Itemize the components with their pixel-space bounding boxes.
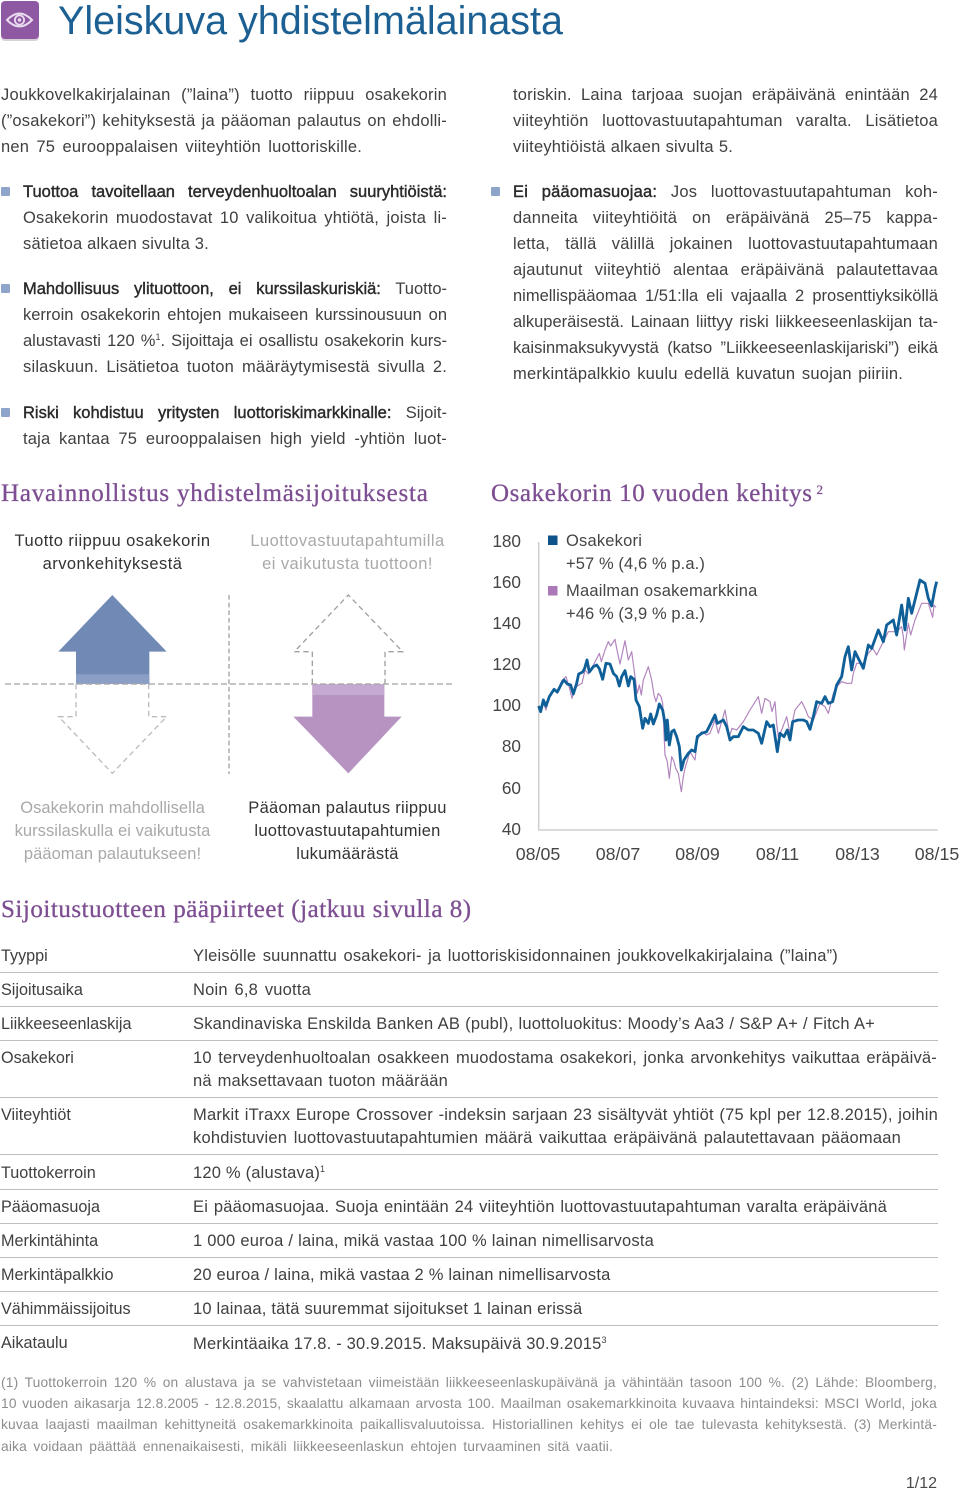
bullet: ylituotto: kerroin osakekorin ehtojen mukaiseen kurssinousuun on bbox=[23, 306, 447, 324]
legend: osakekori: +57 % (4,6 % p.a.) bbox=[566, 555, 705, 573]
table: pääpiirteet: 10 terveydenhuoltoalan osakkeen muodostama osakekori, jonka arvonkehitys vaikuttaa eräpäivä- bbox=[193, 1049, 937, 1067]
table: pääpiirteet: Viiteyhtiöt bbox=[1, 1106, 71, 1124]
footnotes bbox=[1, 1375, 937, 1454]
caption: pääoman palautus: Pääoman palautus riippuu bbox=[248, 799, 447, 817]
bullet: ylituotto bbox=[1, 280, 447, 376]
heading: kehitys: Osakekorin 10 vuoden kehitys 2 bbox=[491, 480, 824, 507]
legend: osakekori: Osakekori bbox=[566, 532, 642, 550]
table: pääpiirteet bbox=[0, 947, 938, 1353]
table: pääpiirteet: Skandinaviska Enskilda Banken AB (publ), luottoluokitus: Moody’s Aa3 / S&P A+ / Fitch A+ bbox=[193, 1015, 875, 1033]
y axis labels: 80 bbox=[502, 736, 521, 756]
text block: intro left bbox=[1, 86, 447, 156]
text block: intro left: (”osakekori”) kehityksestä ja pääoman palautus on ehdolli- bbox=[1, 112, 447, 130]
table: pääpiirteet: Merkintäpalkkio bbox=[1, 1266, 113, 1284]
caption: luottovastuutapahtumilla: Luottovastuutapahtumilla bbox=[250, 532, 445, 550]
x axis labels: 08/09 bbox=[675, 844, 720, 864]
bullet: pääomasuoja: nimellispääomaa 1/51:lla eli vajaalla 2 prosenttiyksiköllä bbox=[513, 286, 938, 304]
bullet: pääomasuoja: alkuperäisestä. Lainaan liittyy riski liikkeeseenlaskijan ta- bbox=[513, 312, 938, 330]
table: pääpiirteet: Tyyppi bbox=[1, 947, 48, 965]
footnotes: 10 vuoden aikasarja 12.8.2005 - 12.8.2015, skaalattu alkamaan arvosta 100. Maailman osakemarkkinoita kuvaava hintaindeksi: MSCI World, joka bbox=[1, 1396, 937, 1411]
text block: intro right: toriskin. Laina tarjoaa suojan eräpäivänä enintään 24 bbox=[513, 86, 938, 104]
heading: havainnollistus: Havainnollistus yhdistelmäsijoituksesta bbox=[1, 480, 429, 507]
caption: kurssilasku: pääoman palautukseen! bbox=[24, 845, 201, 863]
heading: sijoitustuotteen pääpiirteet: Sijoitustuotteen pääpiirteet (jatkuu sivulla 8) bbox=[1, 896, 472, 923]
arrow: down solid purple bbox=[293, 684, 402, 773]
caption: pääoman palautus: luottovastuutapahtumien bbox=[254, 822, 441, 840]
legend: osakekori bbox=[548, 532, 705, 573]
table: pääpiirteet: Aikataulu bbox=[1, 1334, 68, 1352]
table: pääpiirteet: Merkintähinta bbox=[1, 1232, 98, 1250]
caption: pääoman palautus bbox=[248, 799, 447, 863]
table: pääpiirteet: Tuottokerroin bbox=[1, 1164, 96, 1182]
arrow: up solid blue bbox=[58, 595, 167, 684]
table: pääpiirteet: nä maksettavaan tuoton määrään bbox=[193, 1072, 448, 1090]
arrow: down dashed grey bbox=[59, 684, 167, 773]
bullet: pääomasuoja: Ei pääomasuojaa: Jos luottovastuutapahtuman koh- bbox=[513, 182, 938, 200]
bullet: pääomasuoja: kaisinmaksukyvystä (katso ”Liikkeeseenlaskijariski”) eikä bbox=[513, 338, 938, 356]
bullet: ylituotto: silaskuun. Lisätietoa tuoton määräytymisestä sivulla 2. bbox=[23, 358, 447, 376]
caption: pääoman palautus: lukumäärästä bbox=[296, 845, 399, 863]
x axis labels: 08/07 bbox=[596, 844, 640, 864]
x axis labels: 08/13 bbox=[835, 844, 880, 864]
bullet: ylituotto: alustavasti 120 %1. Sijoittaja ei osallistu osakekorin kurs- bbox=[23, 332, 447, 350]
footnotes: kuvaa laajasti maailman kehittyneitä osakemarkkinoita paikallisvaluutoissa. Historiallinen kehitys ei ole tae tulevasta kehityksestä. (3) Merkintä- bbox=[1, 1417, 937, 1432]
table: pääpiirteet: 1 000 euroa / laina, mikä vastaa 100 % lainan nimellisarvosta bbox=[193, 1232, 654, 1250]
table: pääpiirteet: Osakekori bbox=[1, 1049, 74, 1067]
bullet: pääomasuoja: letta, tällä välillä jokainen luottovastuutapahtumaan bbox=[513, 234, 938, 252]
legend: maailman osakemarkkina: Maailman osakemarkkina bbox=[566, 582, 758, 600]
bullet: pääomasuoja: danneita viiteyhtiöitä on eräpäivänä 25–75 kappa- bbox=[513, 208, 938, 226]
caption: luottovastuutapahtumilla bbox=[250, 532, 445, 573]
bullet: tuotto bbox=[1, 182, 447, 252]
table: pääpiirteet: 120 % (alustava)1 bbox=[193, 1164, 325, 1182]
table: pääpiirteet: Yleisölle suunnattu osakekori- ja luottoriskisidonnainen joukkovelkakirjalaina (”laina”) bbox=[193, 947, 838, 965]
y axis labels: 100 bbox=[492, 695, 521, 715]
table: pääpiirteet: Liikkeeseenlaskija bbox=[1, 1015, 131, 1033]
caption: tuotto riippuu: arvonkehityksestä bbox=[43, 555, 182, 573]
page number: 1/12 bbox=[906, 1475, 937, 1492]
caption: tuotto riippuu: Tuotto riippuu osakekorin bbox=[15, 532, 210, 550]
caption: luottovastuutapahtumilla: ei vaikutusta tuottoon! bbox=[262, 555, 433, 573]
table: pääpiirteet: Ei pääomasuojaa. Suoja enintään 24 viiteyhtiön luottovastuutapahtuman varalta eräpäivänä bbox=[193, 1198, 887, 1216]
table: pääpiirteet: Noin 6,8 vuotta bbox=[193, 981, 311, 999]
bullet: tuotto: Tuottoa tavoitellaan terveydenhuoltoalan suuryhtiöistä: bbox=[23, 182, 447, 200]
footnotes: aika voidaan päättää ennenaikaisesti, mikäli liikkeeseenlaskun ehtojen turvaaminen sitä vaatii. bbox=[1, 1439, 613, 1454]
y axis labels: 140 bbox=[492, 613, 521, 633]
table: pääpiirteet: Vähimmäissijoitus bbox=[1, 1300, 131, 1318]
table: pääpiirteet: Pääomasuoja bbox=[1, 1198, 100, 1216]
legend: maailman osakemarkkina bbox=[548, 582, 758, 623]
footnotes: (1) Tuottokerroin 120 % on alustava ja se vahvistetaan viimeistään liikkeeseenlaskupäivänä ja vähintään tasoon 100 %. (2) Lähde: Bloomberg, bbox=[1, 1375, 937, 1390]
table: pääpiirteet: Merkintäaika 17.8. - 30.9.2015. Maksupäivä 30.9.20153 bbox=[193, 1335, 607, 1353]
text block: intro right: viiteyhtiön luottovastuutapahtuman varalta. Lisätietoa bbox=[513, 112, 938, 130]
y axis labels: 160 bbox=[492, 572, 521, 592]
series: maailman osakemarkkina bbox=[539, 603, 936, 792]
title: Yleiskuva yhdistelmälainasta bbox=[58, 0, 563, 43]
series: osakekori bbox=[539, 580, 937, 770]
caption: tuotto riippuu bbox=[14, 532, 210, 573]
text block: intro right bbox=[513, 86, 938, 156]
bullet: pääomasuoja bbox=[491, 182, 938, 382]
table: pääpiirteet: kohdistuvien luottovastuutapahtumien määrä vaikuttaa eräpäivänä palautettavaan pääomaan bbox=[193, 1129, 901, 1147]
bullet: riski: Riski kohdistuu yritysten luottoriskimarkkinalle: Sijoit- bbox=[23, 404, 447, 422]
line chart bbox=[492, 531, 959, 864]
y axis labels: 120 bbox=[492, 654, 521, 674]
bullet: ylituotto: Mahdollisuus ylituottoon, ei kurssilaskuriskiä: Tuotto- bbox=[23, 280, 447, 298]
x axis labels: 08/05 bbox=[516, 844, 560, 864]
text block: intro right: viiteyhtiöistä alkaen sivulta 5. bbox=[513, 138, 733, 156]
y axis labels: 60 bbox=[502, 778, 521, 798]
legend: maailman osakemarkkina: +46 % (3,9 % p.a.) bbox=[566, 605, 705, 623]
diagram: arrows bbox=[5, 594, 452, 774]
text block: intro left: Joukkovelkakirjalainan (”laina”) tuotto riippuu osakekorin bbox=[1, 86, 447, 104]
bullet: tuotto: sätietoa alkaen sivulta 3. bbox=[23, 234, 209, 252]
bullet: riski bbox=[1, 404, 447, 448]
bullet: pääomasuoja: ajautunut viiteyhtiö alentaa eräpäivänä palautettavaa bbox=[513, 260, 938, 278]
x axis labels bbox=[516, 844, 959, 864]
bullet: tuotto: Osakekorin muodostavat 10 valikoitua yhtiötä, joista li- bbox=[23, 208, 447, 226]
y axis labels: 180 bbox=[492, 531, 521, 551]
y axis labels: 40 bbox=[502, 819, 521, 839]
x axis labels: 08/15 bbox=[915, 844, 959, 864]
caption: kurssilasku: Osakekorin mahdollisella bbox=[20, 799, 205, 817]
caption: kurssilasku: kurssilaskulla ei vaikutusta bbox=[15, 822, 210, 840]
table: pääpiirteet: 10 lainaa, tätä suuremmat sijoitukset 1 lainan erissä bbox=[193, 1300, 582, 1318]
text block: intro left: nen 75 eurooppalaisen viiteyhtiön luottoriskille. bbox=[1, 138, 362, 156]
arrow: up dashed grey bbox=[294, 595, 403, 684]
bullet: riski: taja kantaa 75 eurooppalaisen high yield -yhtiön luot- bbox=[23, 430, 447, 448]
y axis labels bbox=[492, 531, 521, 839]
icon: eye bbox=[1, 1, 39, 41]
caption: kurssilasku bbox=[15, 799, 210, 863]
table: pääpiirteet: 20 euroa / laina, mikä vastaa 2 % lainan nimellisarvosta bbox=[193, 1266, 610, 1284]
x axis labels: 08/11 bbox=[756, 844, 799, 864]
bullet: pääomasuoja: merkintäpalkkio kuulu edellä kuvatun suojan piiriin. bbox=[513, 364, 903, 382]
table: pääpiirteet: Markit iTraxx Europe Crossover -indeksin sarjaan 23 sisältyvät yhtiöt (75 kpl per 12.8.2015), joihin bbox=[193, 1106, 938, 1124]
table: pääpiirteet: Sijoitusaika bbox=[1, 981, 83, 999]
